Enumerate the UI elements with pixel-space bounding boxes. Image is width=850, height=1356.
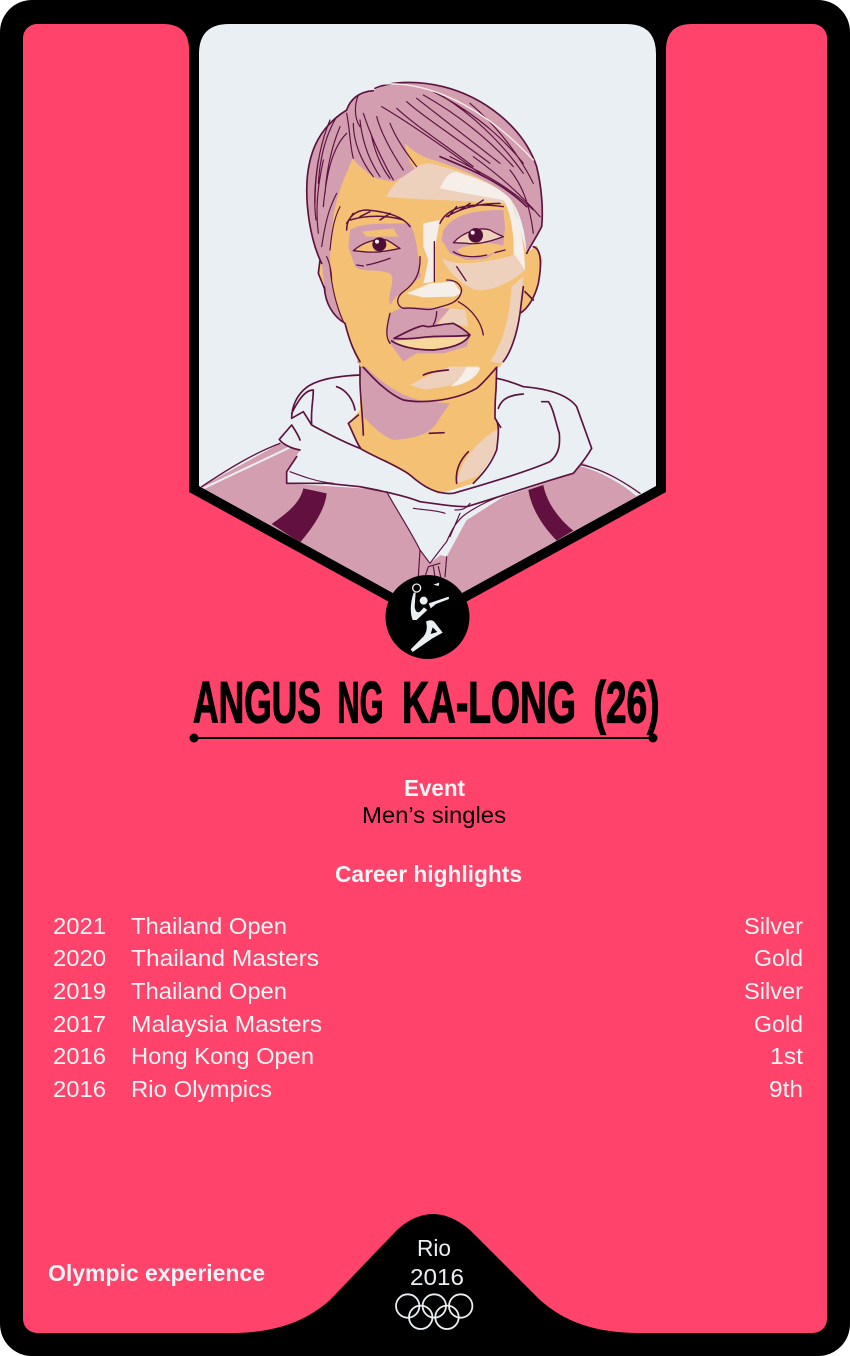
career highlights table: 9th [769,1076,803,1102]
hair [307,83,542,323]
title underline [190,734,658,742]
title: NG [338,670,384,736]
career highlights table: Gold [754,945,803,971]
career highlights heading: Career highlights [335,861,522,887]
career highlights table: Rio Olympics [131,1076,272,1102]
portrait frame [163,24,692,623]
face shadows [348,223,421,305]
career highlights table: Hong Kong Open [131,1043,314,1069]
jacket and hood [201,361,641,593]
career highlights table: Malaysia Masters [131,1011,322,1037]
event label: Event [404,775,465,801]
career highlights table: Thailand Open [131,978,287,1004]
olympic experience label: Olympic experience [48,1260,265,1286]
face line work [345,247,540,362]
face skin [317,140,543,367]
career highlights table: 1st [770,1043,803,1069]
badge circle [386,575,470,659]
career highlights table: 2019 [53,978,106,1004]
career highlights table: 2020 [53,945,106,971]
title: (26) [594,670,660,736]
career highlights table: Silver [744,978,803,1004]
neck [348,360,500,494]
face highlights [387,163,510,203]
career highlights table: Gold [754,1011,803,1037]
title: ANGUS [193,670,321,736]
career highlights table: Thailand Masters [131,945,319,971]
event value: Men’s singles [362,802,506,828]
career highlights table: 2016 [53,1076,106,1102]
portrait illustration [190,82,663,650]
games name: Rio [417,1235,451,1261]
hair line work [315,92,540,322]
icon: badminton player [411,583,449,652]
career highlights table: Silver [744,913,803,939]
title [193,670,660,736]
left eye [353,240,400,252]
mouth [392,323,470,350]
career highlights table: 2016 [53,1043,106,1069]
tab shape [230,1214,640,1340]
badminton pictogram badge [386,575,470,659]
olympics tab [230,1214,640,1340]
portrait panel [199,24,656,612]
right eye [453,229,503,244]
icon: olympic rings [396,1294,472,1329]
title: KA-LONG [402,670,576,736]
lips [442,324,468,335]
career highlights table: 2017 [53,1011,106,1037]
career highlights table [53,913,803,1102]
clothing line work [279,375,592,507]
jaw and neck lines [348,355,507,483]
career highlights table: 2021 [53,913,106,939]
head [307,82,543,367]
nose highlight [423,220,440,283]
career highlights table: Thailand Open [131,913,287,939]
eyebrows [347,200,503,230]
games year: 2016 [410,1264,464,1290]
